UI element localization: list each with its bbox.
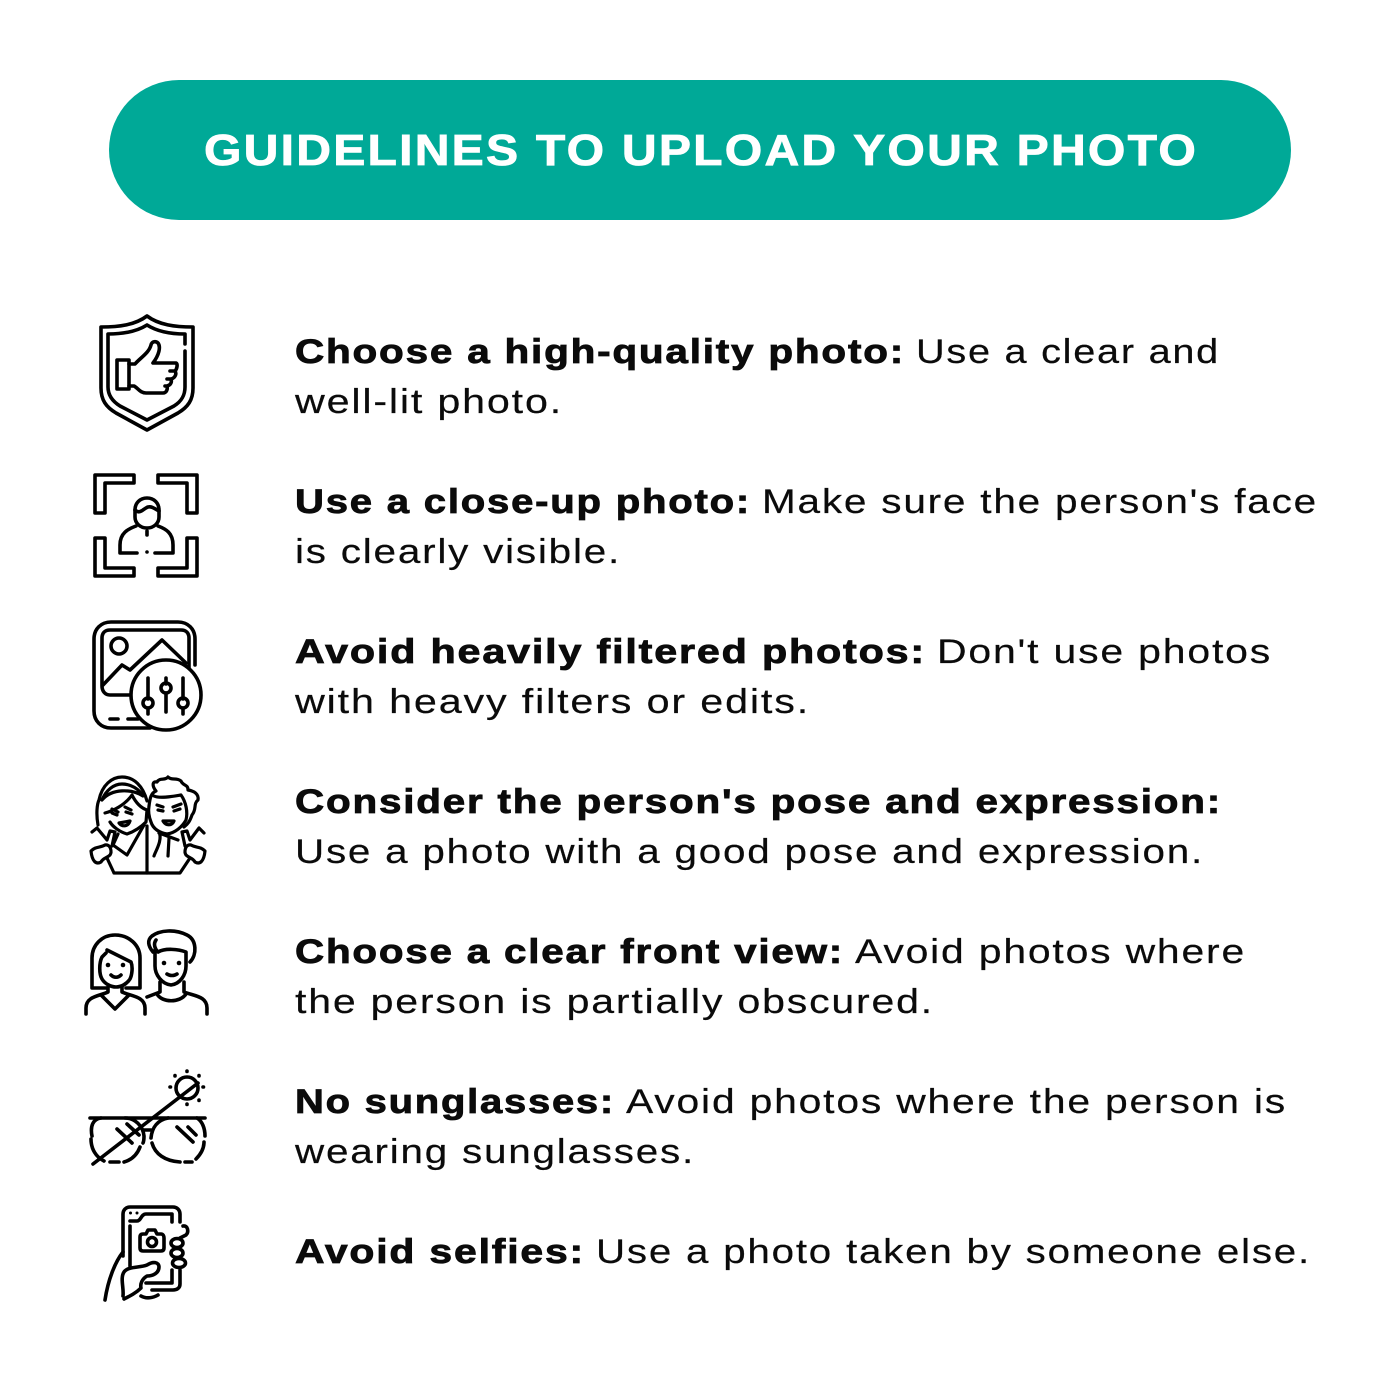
- guideline text 4: [295, 783, 1222, 871]
- guideline text 1: Use a clear and: [916, 333, 1220, 371]
- guideline text 5: Avoid photos where: [855, 933, 1246, 971]
- guideline text 1: [294, 333, 1220, 421]
- guideline text 6: No sunglasses:: [295, 1083, 615, 1121]
- guideline text 3: Don't use photos: [937, 633, 1272, 671]
- guideline text 4: Consider the person's pose and expression:: [295, 783, 1222, 821]
- guideline text 6: wearing sunglasses.: [294, 1133, 695, 1171]
- panel: no sunglasses guideline: [90, 1071, 1287, 1171]
- guideline text 2: Use a close-up photo:: [295, 483, 751, 521]
- panel: high-quality photo guideline: [101, 316, 1220, 430]
- icon: person in focus frame: [95, 475, 197, 576]
- guideline text 2: Make sure the person's face: [762, 483, 1318, 521]
- title: GUIDELINES TO UPLOAD YOUR PHOTO: [204, 126, 1198, 175]
- guideline text 3: [294, 633, 1272, 721]
- guideline text 1: Choose a high-quality photo:: [295, 333, 905, 371]
- panel: close-up photo guideline: [95, 475, 1318, 576]
- icon: woman and man facing front: [86, 931, 207, 1014]
- guideline text 7: [295, 1233, 1311, 1271]
- title banner: [109, 80, 1291, 220]
- panel: no selfies guideline: [105, 1207, 1311, 1300]
- guideline text 6: [294, 1083, 1287, 1171]
- icon: two friends making peace signs: [91, 777, 205, 873]
- guideline text 7: Avoid selfies:: [295, 1233, 585, 1271]
- guideline text 4: Use a photo with a good pose and expression.: [295, 833, 1204, 871]
- guideline text 2: is clearly visible.: [295, 533, 621, 571]
- guideline text 7: Use a photo taken by someone else.: [596, 1233, 1311, 1271]
- icon: shield with thumbs up: [101, 316, 193, 430]
- guideline text 5: the person is partially obscured.: [295, 983, 934, 1021]
- icon: hand holding phone with camera: [105, 1207, 188, 1300]
- guideline text 3: with heavy filters or edits.: [294, 683, 810, 721]
- icon: picture with filter sliders: [94, 622, 201, 730]
- panel: clear front view guideline: [86, 931, 1246, 1021]
- panel: pose and expression guideline: [91, 777, 1222, 873]
- guideline text 3: Avoid heavily filtered photos:: [295, 633, 926, 671]
- guideline text 5: [295, 933, 1246, 1021]
- guideline text 6: Avoid photos where the person is: [626, 1083, 1287, 1121]
- panel: filtered photos guideline: [94, 622, 1272, 730]
- guideline text 1: well-lit photo.: [294, 383, 563, 421]
- icon: crossed-out sunglasses and sun: [90, 1071, 205, 1164]
- guideline text 2: [295, 483, 1318, 571]
- guideline text 5: Choose a clear front view:: [295, 933, 844, 971]
